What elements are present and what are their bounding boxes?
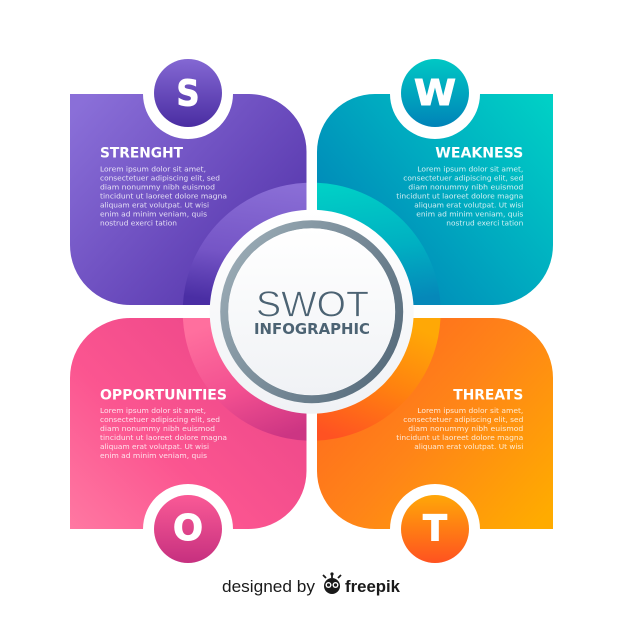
inner disc xyxy=(228,228,395,395)
grey ring xyxy=(224,224,399,399)
purple arc xyxy=(183,182,306,305)
body text: opportunities: enim ad minim veniam, quis xyxy=(100,451,207,460)
orange panel shape xyxy=(317,318,553,529)
body text: weakness: Lorem ipsum dolor sit amet, xyxy=(417,164,523,174)
body text: strength: aliquam erat volutpat. Ut wisi xyxy=(100,200,209,210)
center circle xyxy=(210,210,414,414)
icon: freepik bee xyxy=(323,572,341,594)
body text: opportunities: diam nonummy nibh euismod xyxy=(100,424,215,433)
heading: weakness: WEAKNESS xyxy=(435,146,523,162)
heading: strenght: STRENGHT xyxy=(100,146,183,162)
subtitle: infographic: INFOGRAPHIC xyxy=(254,320,370,338)
teal arc xyxy=(317,182,440,305)
body text: opportunities: Lorem ipsum dolor sit amet, xyxy=(100,406,206,415)
body text: weakness xyxy=(396,164,524,228)
body text: weakness: diam nonummy nibh euismod xyxy=(408,182,523,192)
body text: threats: consectetuer adipiscing elit, sed xyxy=(403,415,523,424)
footer credit xyxy=(222,572,401,596)
badge: T: T xyxy=(423,508,447,550)
footer text: freepik: freepik xyxy=(345,577,401,596)
purple panel shape xyxy=(70,94,306,305)
body text: opportunities xyxy=(100,406,227,460)
panel: threats xyxy=(317,318,553,563)
title: SWOT: SWOT xyxy=(256,284,369,325)
badge: S: S xyxy=(176,74,200,114)
footer text: designed by: designed by xyxy=(222,578,316,596)
body text: opportunities: aliquam erat volutpat. Ut wisi xyxy=(100,442,209,451)
body text: weakness: consectetuer adipiscing elit, sed xyxy=(403,174,523,182)
orange arc xyxy=(317,318,440,440)
heading: opportunities: OPPORTUNITIES xyxy=(100,388,227,404)
body text: opportunities: consectetuer adipiscing elit, sed xyxy=(100,415,220,424)
body text: strength: enim ad minim veniam, quis xyxy=(100,210,207,218)
body text: strength xyxy=(100,164,227,228)
badge: O: O xyxy=(173,508,203,549)
pink panel shape xyxy=(70,318,306,529)
badge: W: W xyxy=(414,73,456,114)
outer pale disc xyxy=(210,210,414,414)
pink arc xyxy=(182,318,306,440)
body text: strength: Lorem ipsum dolor sit amet, xyxy=(100,164,206,174)
body text: strength: diam nonummy nibh euismod xyxy=(100,182,215,192)
body text: weakness: aliquam erat volutpat. Ut wisi xyxy=(414,200,523,210)
panel: opportunities xyxy=(70,318,306,563)
body text: threats: aliquam erat volutpat. Ut wisi xyxy=(414,442,523,451)
badge: O xyxy=(154,495,222,563)
badge: W xyxy=(401,59,469,127)
body text: strength: consectetuer adipiscing elit, sed xyxy=(100,174,220,182)
panel: strength xyxy=(70,59,306,305)
body text: strength: nostrud exerci tation xyxy=(100,218,177,228)
body text: threats: diam nonummy nibh euismod xyxy=(408,424,523,433)
panel: weakness xyxy=(317,59,553,305)
body text: weakness: tincidunt ut laoreet dolore magna xyxy=(396,192,523,200)
body text: weakness: enim ad minim veniam, quis xyxy=(416,210,524,218)
body text: opportunities: tincidunt ut laoreet dolore magna xyxy=(100,433,227,442)
heading: threats: THREATS xyxy=(453,388,523,404)
body text: threats xyxy=(396,406,523,451)
body text: weakness: nostrud exerci tation xyxy=(446,218,523,228)
badge: T xyxy=(401,495,469,563)
body text: threats: tincidunt ut laoreet dolore magna xyxy=(396,433,523,442)
body text: threats: Lorem ipsum dolor sit amet, xyxy=(417,406,523,415)
teal panel shape xyxy=(317,94,553,305)
badge: S xyxy=(154,59,222,127)
body text: strength: tincidunt ut laoreet dolore magna xyxy=(100,192,227,200)
